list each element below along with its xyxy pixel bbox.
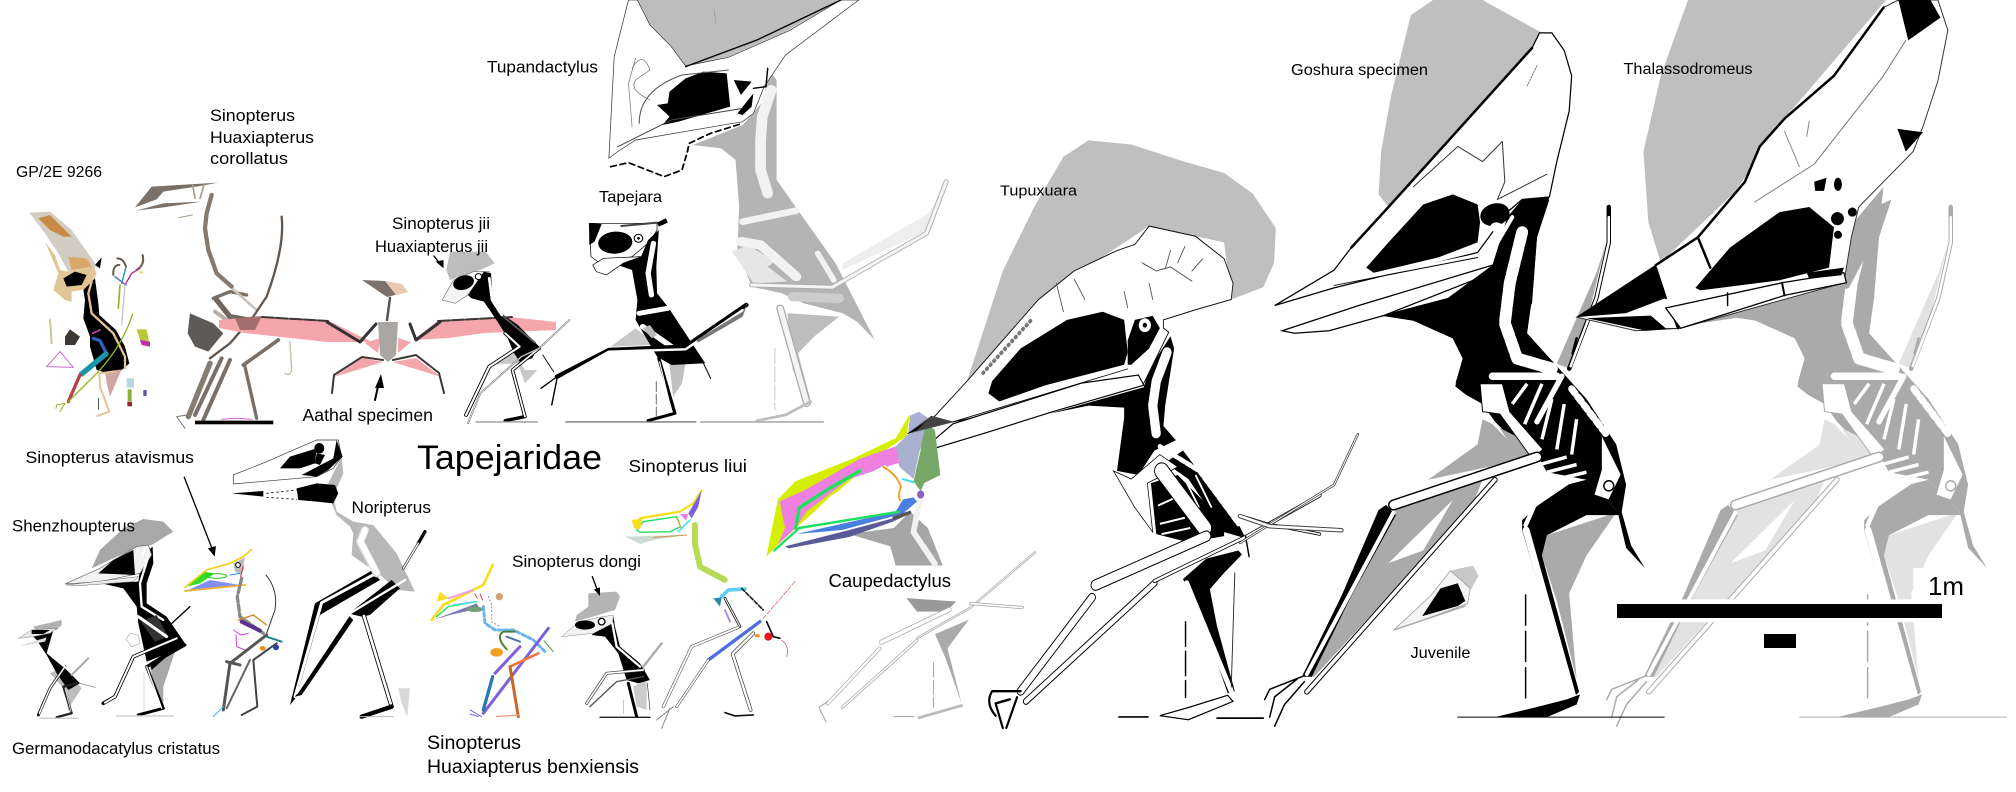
label: Sinopterus jii Huaxiapterus jii: Huaxiapterus jii bbox=[375, 238, 488, 256]
label: Shenzhoupterus: Shenzhoupterus bbox=[12, 516, 135, 536]
arrow: Aathal specimen pointer bbox=[375, 374, 384, 400]
figure: Sinopterus liui colour skeleton bbox=[625, 491, 795, 728]
figure: Tupuxuara bbox=[921, 140, 1320, 728]
figure: Tupandactylus skull bbox=[609, 0, 859, 177]
arrow: Sinopterus jii pointer bbox=[434, 256, 444, 268]
label: Sinopterus Huaxiapterus corollatus: corollatus bbox=[210, 149, 288, 168]
label: Sinopterus Huaxiapterus corollatus: Sinopterus bbox=[210, 106, 295, 125]
figure: Goshura specimen skull bbox=[1275, 0, 1572, 386]
label: Sinopterus Huaxiapterus corollatus bbox=[210, 106, 314, 168]
label: Sinopterus Huaxiapterus benxiensis bbox=[427, 733, 639, 778]
label: Sinopterus dongi: Sinopterus dongi bbox=[512, 552, 641, 571]
label: Sinopterus Huaxiapterus benxiensis: Sinopterus bbox=[427, 733, 521, 754]
title: Tapejaridae: Tapejaridae bbox=[417, 439, 602, 477]
label: Sinopterus Huaxiapterus benxiensis: Huaxiapterus benxiensis bbox=[427, 757, 639, 778]
label: Tupandactylus: Tupandactylus bbox=[487, 59, 598, 77]
label: GP/2E 9266: GP/2E 9266 bbox=[16, 164, 102, 181]
label: Noripterus: Noripterus bbox=[352, 498, 431, 517]
label: Thalassodromeus: Thalassodromeus bbox=[1624, 61, 1753, 78]
label: Sinopterus jii Huaxiapterus jii: Sinopterus jii bbox=[392, 215, 490, 233]
figure: Caupedactylus grey skeleton bbox=[819, 495, 1035, 722]
scale bar: 1 m bbox=[1617, 604, 1942, 648]
figure: Sinopterus dongi bbox=[562, 577, 662, 717]
label: Sinopterus atavismus: Sinopterus atavismus bbox=[26, 448, 194, 467]
label: Tapejara: Tapejara bbox=[599, 189, 662, 206]
label: Juvenile: Juvenile bbox=[1410, 645, 1470, 662]
label: Goshura specimen: Goshura specimen bbox=[1291, 62, 1428, 79]
figure: GP/2E 9266 specimen bbox=[29, 212, 150, 416]
label: Sinopterus Huaxiapterus corollatus: Huaxiapterus bbox=[210, 128, 314, 147]
figure: Tapejara bbox=[541, 218, 748, 422]
figure: Goshura specimen body bbox=[1265, 199, 1664, 726]
figure: Germanodactylus cristatus bbox=[18, 620, 95, 718]
figure: Tupuxuara wing finger bbox=[1240, 434, 1358, 543]
panel: scale bar backdrop bbox=[1614, 568, 1987, 622]
label: Sinopterus liui: Sinopterus liui bbox=[628, 456, 747, 476]
label: Germanodacatylus cristatus: Germanodacatylus cristatus bbox=[12, 740, 220, 758]
figure: Thalassodromeus skull bbox=[1577, 0, 1948, 331]
figure: Sinopterus jii bbox=[442, 252, 570, 423]
figure: Sinopterus benxiensis colour skeleton bbox=[432, 565, 553, 717]
figure: Thalassodromeus grey body bbox=[1607, 199, 2006, 726]
figure: Caupedactylus colour skull bbox=[766, 412, 955, 557]
label: Tupuxuara: Tupuxuara bbox=[1000, 182, 1078, 200]
label: Sinopterus jii Huaxiapterus jii bbox=[375, 215, 490, 256]
figure: Juvenile skull bbox=[1393, 566, 1479, 630]
label: Caupedactylus: Caupedactylus bbox=[828, 571, 951, 591]
figure: Sinopterus atavismus bbox=[185, 549, 282, 717]
figure: Noripterus bbox=[232, 440, 425, 717]
figure: Aathal specimen with pink wings bbox=[219, 280, 556, 393]
arrow: Sinopterus atavismus pointer bbox=[184, 477, 216, 557]
figure: Tupandactylus grey body bbox=[693, 68, 946, 422]
figure: Shenzhoupterus bbox=[65, 519, 190, 716]
label: 1m: 1m bbox=[1928, 571, 1964, 601]
figure: Sinopterus corollatus fossil skeleton bbox=[135, 183, 292, 428]
label: Aathal specimen: Aathal specimen bbox=[302, 405, 433, 425]
